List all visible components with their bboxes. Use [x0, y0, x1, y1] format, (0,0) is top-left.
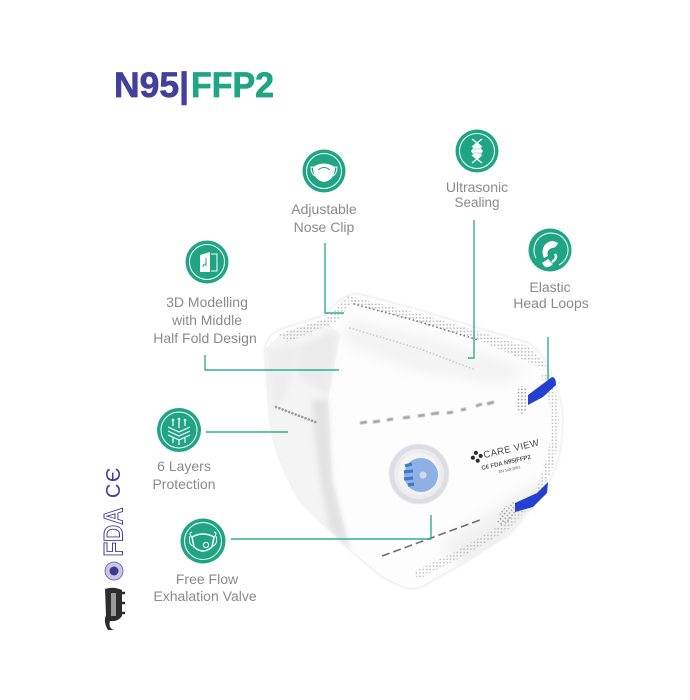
title: N95|FFP2: FFP2 — [191, 66, 274, 105]
brand text: C€ FDA N95|FFP2 — [481, 455, 532, 472]
logo: lion mark — [105, 588, 125, 630]
lower stitch dashes — [382, 520, 480, 556]
label: 6 Layers — [157, 458, 211, 474]
logo: round seal — [105, 562, 123, 580]
connector: nose clip — [325, 243, 344, 313]
ear attachment patches — [516, 386, 528, 414]
logo: CE: Є — [103, 468, 125, 482]
icon: layers — [157, 408, 201, 452]
icon: head with loops — [528, 228, 572, 272]
top dotted seal band — [345, 295, 548, 368]
logo: CE: C — [103, 484, 125, 498]
feature: 6 layers protection: Protection — [152, 476, 216, 492]
mask body — [265, 294, 562, 588]
feature: free flow exhalation valve — [153, 518, 257, 604]
icon: face mask — [302, 150, 346, 192]
connector: exhalation valve — [231, 515, 431, 539]
exhalation valve — [389, 444, 449, 504]
feature: 6 layers protection — [152, 408, 216, 492]
brand text: CARE VIEW — [482, 438, 540, 461]
title: N95|FFP2: N95| — [114, 66, 189, 105]
printed mark row — [360, 402, 494, 423]
label: Adjustable — [291, 201, 357, 217]
mask product image — [262, 294, 562, 588]
blue elastic loop top — [528, 377, 556, 405]
title: N95|FFP2 — [114, 66, 274, 105]
feature: ultrasonic sealing: Sealing — [454, 195, 500, 210]
side stitching — [276, 407, 318, 423]
feature: adjustable nose clip — [291, 150, 357, 235]
feature: 3D modelling — [153, 240, 257, 346]
brand text: EN 149:2001 — [498, 465, 521, 474]
icon: mask with valve — [180, 518, 226, 564]
connector: 6 layers — [206, 431, 288, 433]
logo: FDA: FDA — [98, 508, 128, 556]
icon: weave — [456, 130, 498, 172]
feature: elastic head loops: Head Loops — [513, 295, 589, 311]
label: Elastic — [529, 279, 571, 295]
connector: 3D modelling — [205, 355, 339, 370]
blue elastic loop bottom — [515, 482, 548, 512]
brand text — [470, 437, 544, 480]
bottom dotted seal — [416, 508, 528, 580]
connector: ultrasonic sealing — [468, 220, 474, 358]
right dotted seal — [535, 372, 559, 493]
icon: folded panel — [186, 240, 228, 284]
feature: 3D modelling: Half Fold Design — [153, 330, 257, 346]
connector: head loops — [547, 337, 549, 380]
feature: ultrasonic sealing — [446, 130, 508, 210]
feature: 3D modelling: with Middle — [171, 312, 242, 328]
label: Free Flow — [176, 571, 239, 587]
certification logos — [98, 468, 128, 630]
inner stitched line — [350, 328, 473, 369]
label: 3D Modelling — [166, 294, 248, 310]
shading inside mask — [262, 295, 560, 580]
label: Ultrasonic — [446, 179, 508, 195]
feature: elastic head loops — [513, 228, 589, 311]
nose dotted band — [278, 299, 352, 342]
logo: CE — [103, 468, 125, 498]
feature: adjustable nose clip: Nose Clip — [294, 219, 355, 235]
mask outer shadow — [265, 294, 562, 588]
feature: free flow exhalation valve: Exhalation Valve — [153, 588, 257, 604]
